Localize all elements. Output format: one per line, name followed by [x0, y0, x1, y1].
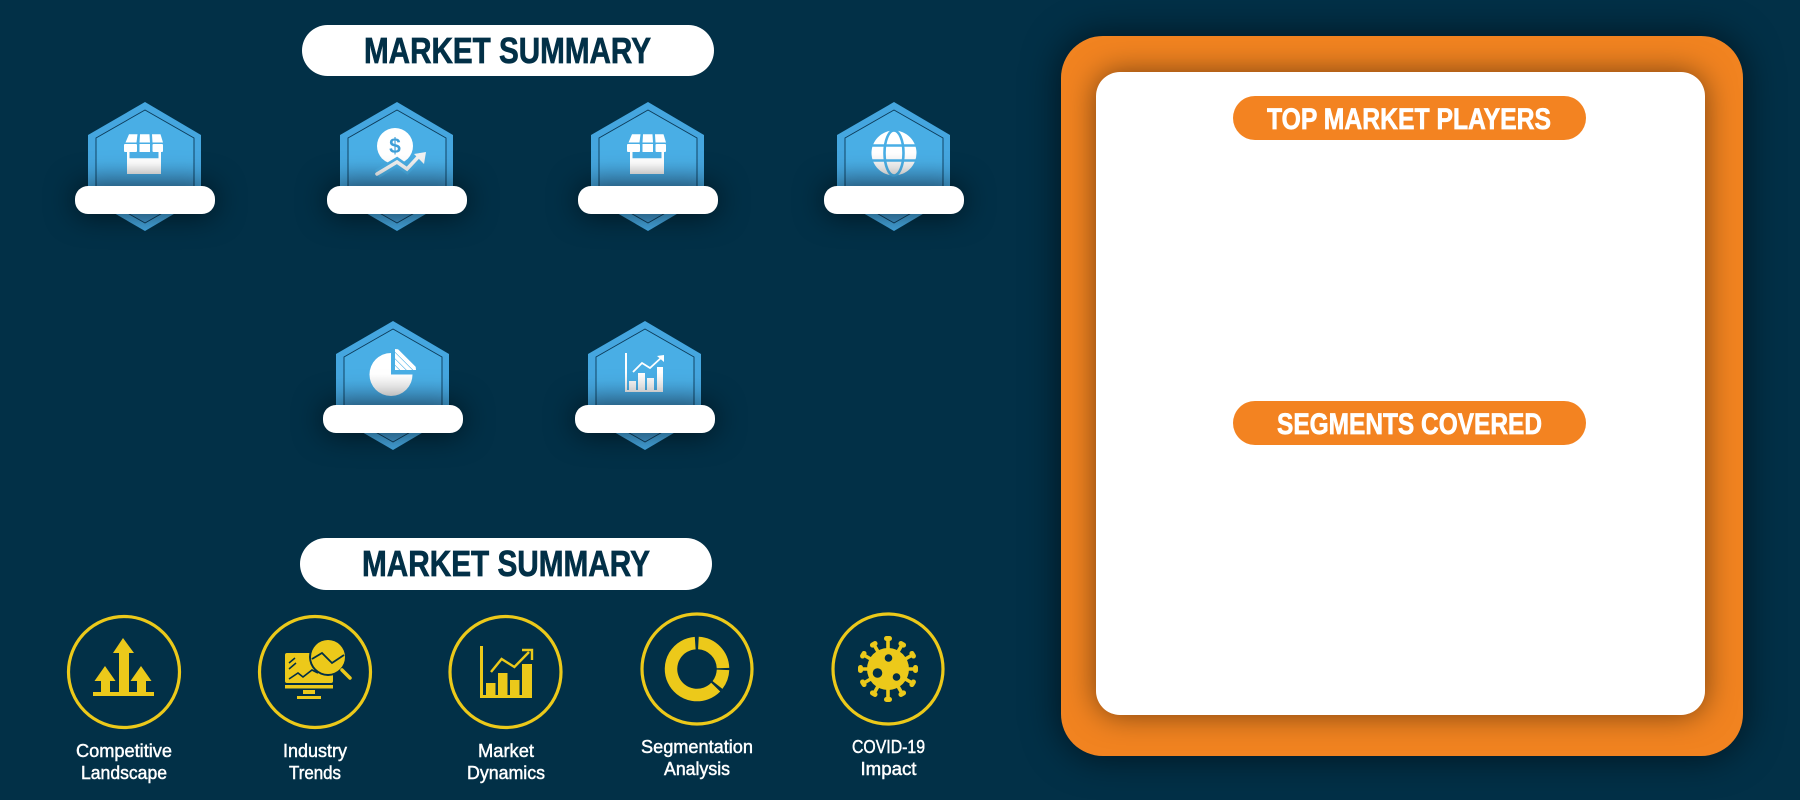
heading: market summary bottom: MARKET SUMMARY	[362, 543, 650, 584]
label: Dynamics	[467, 763, 545, 783]
heading: top market players	[1233, 96, 1586, 140]
icon: donut chart	[671, 643, 723, 695]
badge: store 2	[570, 102, 726, 231]
label: Segmentation	[641, 737, 753, 757]
badge: pie chart	[316, 321, 470, 450]
heading: top market players: TOP MARKET PLAYERS	[1267, 103, 1551, 136]
icon: bars with arrow	[480, 646, 532, 698]
panel: orange frame	[1061, 36, 1743, 756]
panel: white card	[1096, 72, 1705, 715]
item: segmentation analysis	[641, 614, 753, 779]
badge: globe	[816, 102, 972, 231]
item: market dynamics	[450, 616, 561, 783]
badge: store 1	[68, 102, 222, 231]
item: competitive landscape	[68, 616, 180, 783]
badge: bar chart	[568, 321, 722, 450]
badge: revenue growth: $	[389, 135, 401, 158]
heading: segments covered: SEGMENTS COVERED	[1277, 408, 1542, 441]
icon: virus	[858, 636, 918, 702]
label: Analysis	[664, 759, 730, 779]
icon: three arrows	[93, 638, 154, 696]
label: Landscape	[81, 763, 167, 783]
heading: market summary top	[302, 25, 714, 76]
heading: market summary top: MARKET SUMMARY	[364, 30, 651, 71]
label: Competitive	[76, 741, 172, 761]
label: Impact	[860, 759, 916, 779]
label: COVID-19	[852, 737, 925, 757]
heading: segments covered	[1233, 401, 1586, 445]
item: covid-19 impact	[833, 614, 943, 779]
heading: market summary bottom	[300, 538, 712, 590]
item: industry trends	[260, 616, 370, 783]
panel shadow	[1061, 36, 1743, 756]
badge: revenue growth	[320, 102, 474, 231]
label: Industry	[283, 741, 347, 761]
label: Market	[478, 741, 534, 761]
label: Trends	[289, 763, 341, 783]
icon: monitor with magnifier	[285, 638, 350, 699]
